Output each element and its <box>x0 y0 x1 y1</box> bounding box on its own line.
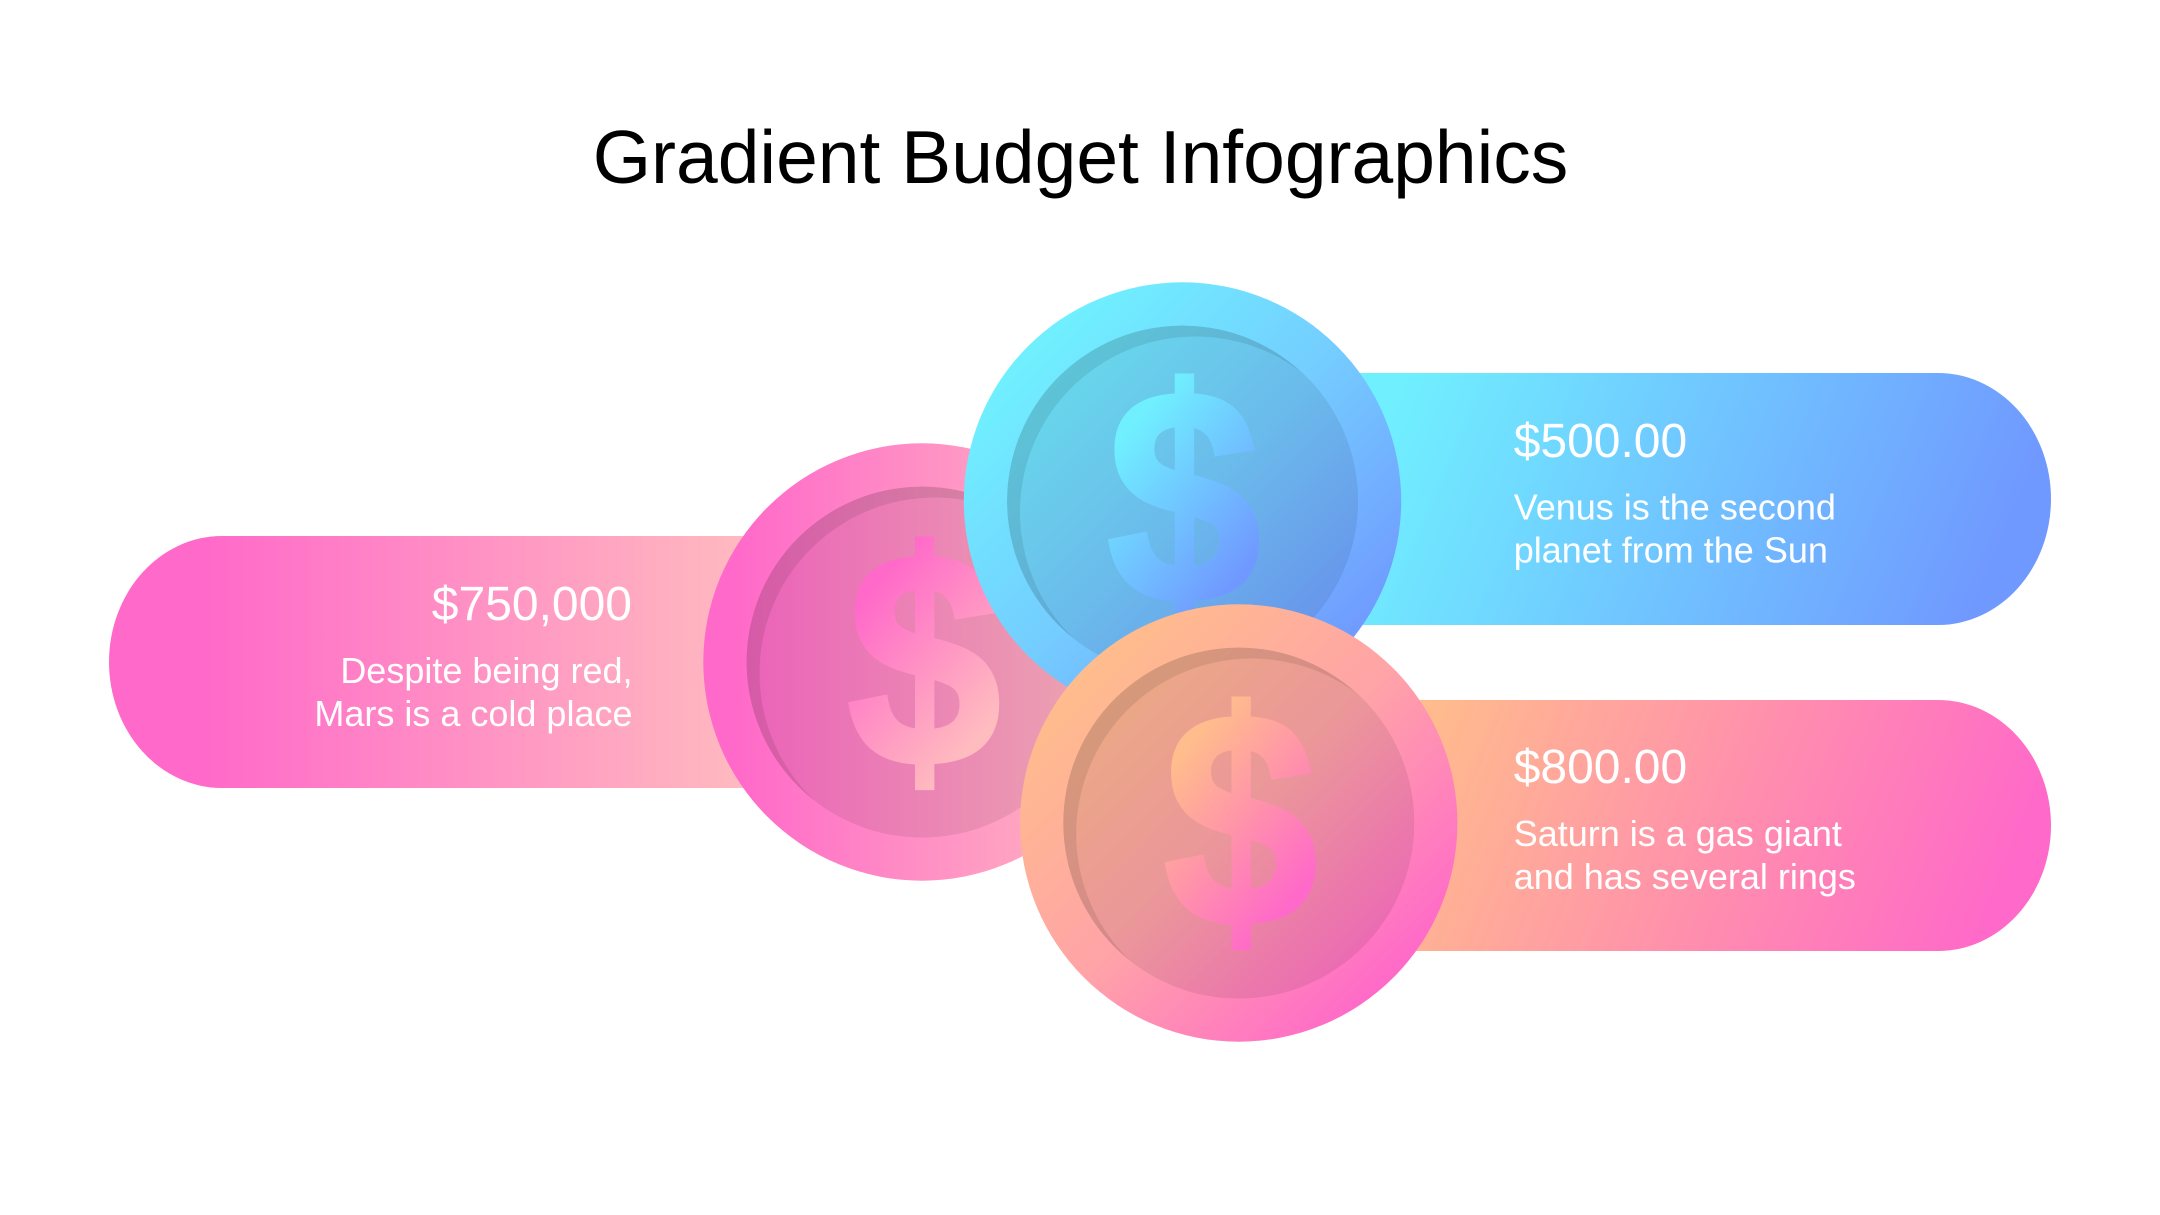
amount: $750,000: $750,000 <box>432 578 632 631</box>
blue bar shape <box>1300 373 2051 625</box>
icon: orange dollar coin <box>1020 604 1457 1042</box>
icon: pink dollar coin: $ <box>847 490 1001 830</box>
description: Venus: Venus is the second <box>1514 486 1836 528</box>
icon: blue dollar coin <box>964 282 1401 720</box>
orange bar shape <box>1300 700 2051 951</box>
icon: blue dollar coin: $ <box>1107 327 1261 667</box>
panel: orange budget bar <box>1300 700 2051 951</box>
amount: $800.00: $800.00 <box>1514 741 1687 794</box>
description: Saturn: Saturn is a gas giant <box>1514 813 1842 854</box>
pink bar shape <box>109 536 760 788</box>
title: Gradient Budget Infographics <box>593 115 1568 199</box>
description: Venus: planet from the Sun <box>1514 530 1828 571</box>
icon: orange dollar coin: $ <box>1164 650 1317 990</box>
icon: pink dollar coin <box>703 443 1068 881</box>
amount: $500.00: $500.00 <box>1514 415 1687 468</box>
panel: blue budget bar <box>1300 373 2051 625</box>
description: Mars: Despite being red, <box>340 650 632 691</box>
panel: pink budget bar <box>109 536 760 788</box>
description: Mars: Mars is a cold place <box>314 693 632 734</box>
description: Saturn: and has several rings <box>1514 856 1856 897</box>
